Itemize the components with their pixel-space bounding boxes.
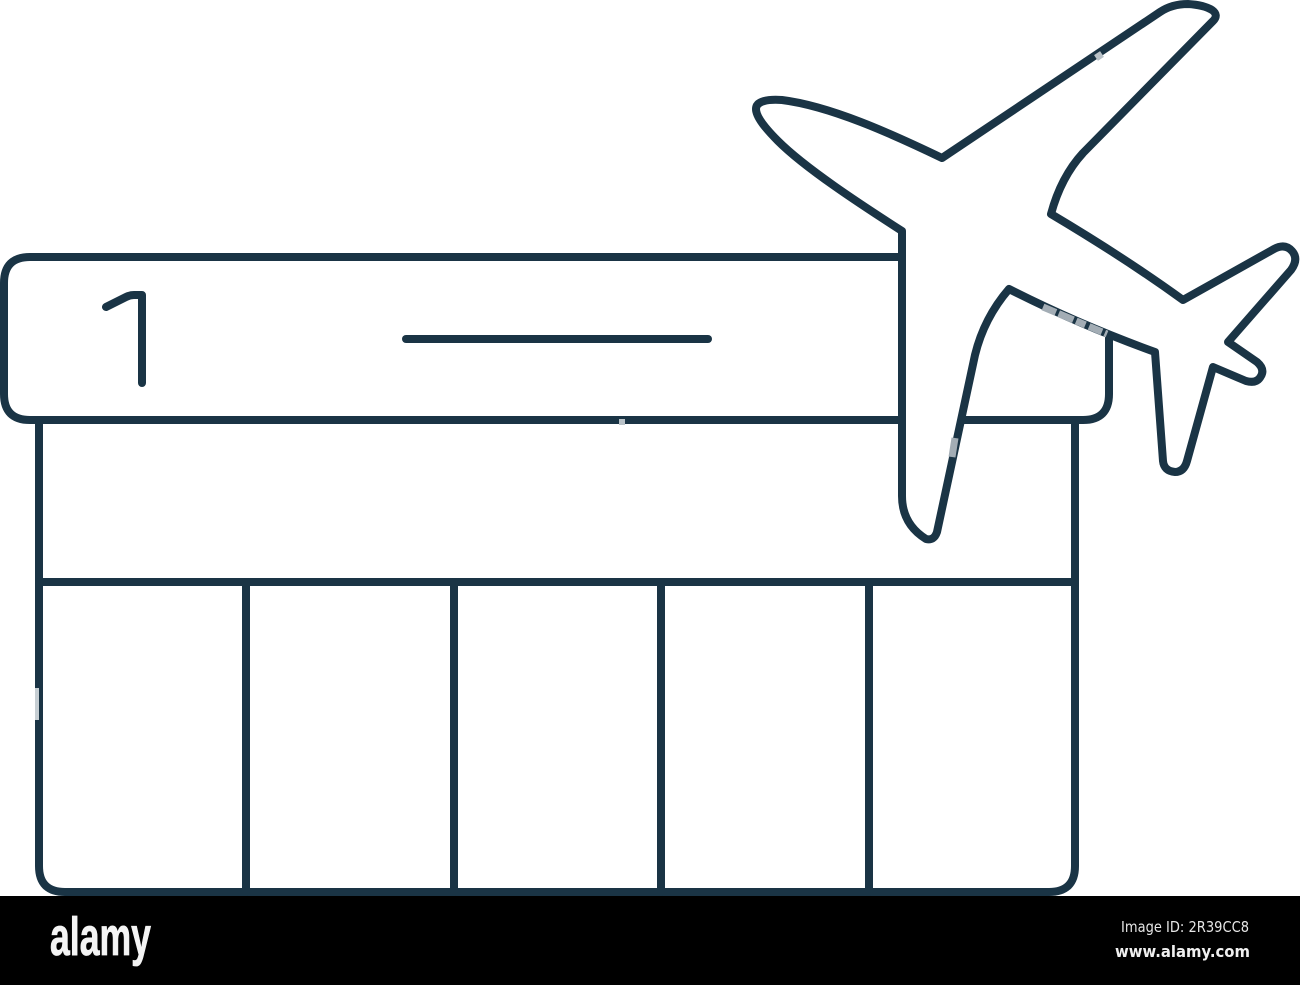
icon: terminal building xyxy=(39,421,1075,892)
footer bar xyxy=(0,896,1300,985)
sign dash xyxy=(406,335,708,343)
sign board xyxy=(4,257,1109,420)
terminal number xyxy=(106,295,142,383)
image id: Image ID: 2R39CC8 xyxy=(1121,918,1249,936)
watermark url: www.alamy.com xyxy=(1115,942,1250,961)
watermark logo: alamy xyxy=(50,907,151,967)
watermark ghost marks xyxy=(37,54,1107,720)
icon: airplane xyxy=(756,4,1295,539)
